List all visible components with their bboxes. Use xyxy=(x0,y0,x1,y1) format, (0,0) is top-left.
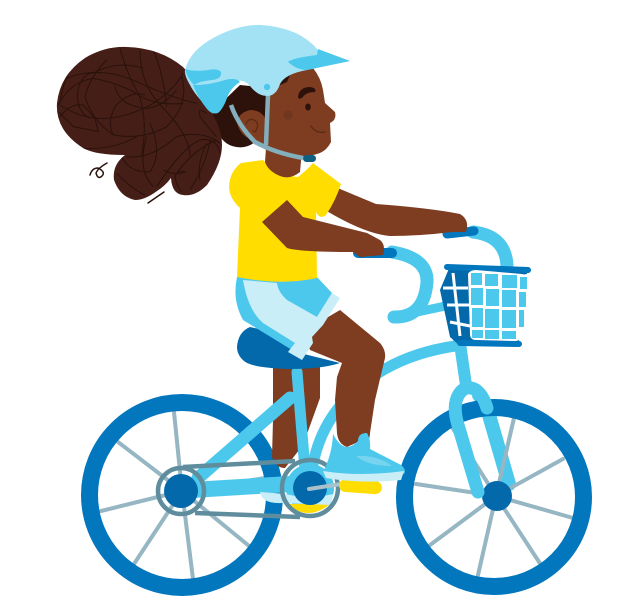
far pedal and shoe xyxy=(260,492,333,513)
shirt xyxy=(229,160,341,282)
front hub xyxy=(482,481,512,511)
chain drive xyxy=(158,460,341,517)
neck xyxy=(265,148,302,177)
basket xyxy=(440,266,530,346)
near arm xyxy=(262,200,384,257)
ponytail hair xyxy=(57,47,222,200)
helmet strap xyxy=(231,95,303,158)
dark hair over forehead xyxy=(278,75,290,86)
near shoe xyxy=(323,433,405,482)
strap buckle xyxy=(303,155,316,162)
hair behind head xyxy=(212,85,270,147)
face features xyxy=(284,87,325,132)
hair strands xyxy=(90,163,164,203)
head xyxy=(253,68,335,157)
helmet xyxy=(185,25,350,113)
near leg xyxy=(305,310,385,447)
ear xyxy=(237,110,266,141)
handlebars xyxy=(358,231,507,317)
far leg xyxy=(272,362,320,468)
hair tangles xyxy=(58,48,220,195)
rear wheel xyxy=(90,402,274,588)
illustration: girl riding a bicycle xyxy=(56,24,592,596)
seat xyxy=(237,327,340,369)
shorts xyxy=(235,277,340,360)
bicycle frame xyxy=(192,330,466,512)
far arm xyxy=(325,184,467,236)
front wheel xyxy=(404,408,584,586)
fork left leg and arch xyxy=(455,388,487,492)
near pedal xyxy=(339,479,382,495)
fork right leg behind wheel xyxy=(479,395,509,484)
